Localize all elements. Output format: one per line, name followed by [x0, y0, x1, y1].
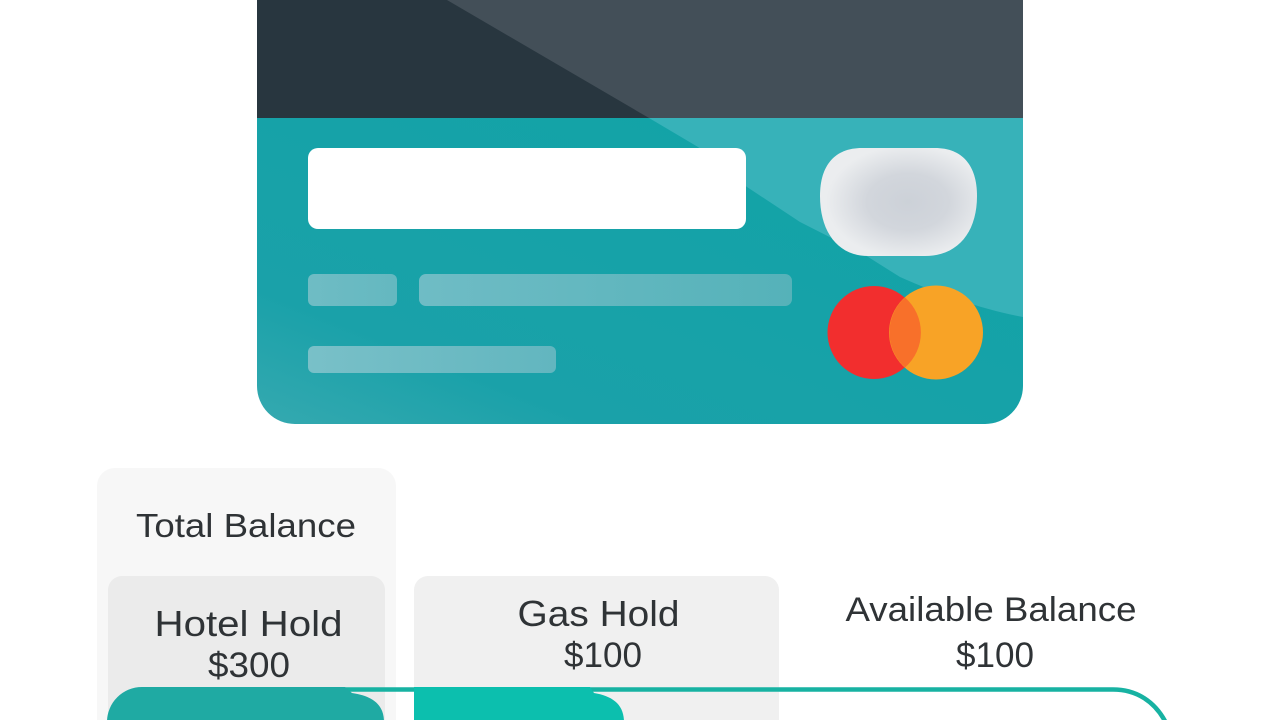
icon: card network logo	[828, 286, 983, 380]
card number bar short	[308, 274, 397, 306]
panel: total balance	[97, 468, 396, 720]
text: available balance amount: $100	[956, 636, 1034, 675]
magnetic stripe highlight	[447, 0, 1023, 118]
text: gas hold label: Gas Hold	[518, 593, 680, 634]
panel: gas hold	[414, 576, 779, 720]
card name bar	[308, 346, 556, 373]
card light fold highlight	[649, 118, 1023, 317]
panel: hotel hold	[108, 576, 385, 720]
bar: available balance outline	[340, 690, 1166, 720]
text block: available balance	[846, 591, 1136, 675]
card teal body	[257, 118, 1023, 424]
text: hotel hold label: Hotel Hold	[154, 603, 342, 644]
heading: total balance: Total Balance	[136, 507, 356, 544]
signature panel	[308, 148, 746, 229]
panel: credit card	[257, 0, 1023, 424]
text: hotel hold amount: $300	[208, 646, 290, 685]
icon: chip	[820, 148, 977, 256]
card number bar long	[419, 274, 792, 306]
bar: gas hold segment	[414, 687, 624, 720]
bar: hotel hold segment	[107, 687, 384, 720]
text: gas hold amount: $100	[564, 636, 642, 675]
magnetic stripe	[257, 0, 649, 118]
text block: available balance: Available Balance	[846, 591, 1136, 629]
